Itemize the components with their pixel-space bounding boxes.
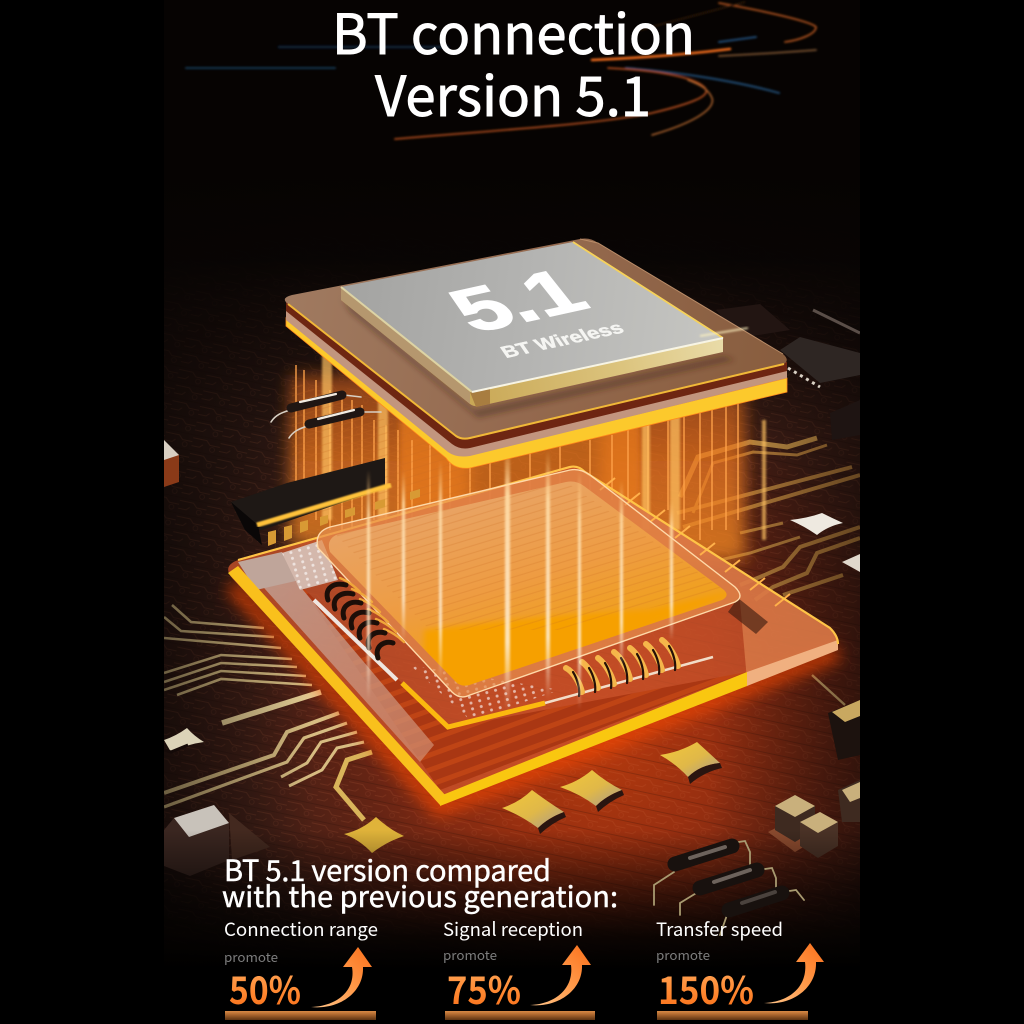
- stat: connection range: Connection range: [224, 916, 378, 942]
- inner yellow L: [402, 683, 545, 727]
- component: pads lower right: [768, 818, 822, 852]
- stat: transfer speed: 150%: [658, 960, 754, 1015]
- component: white pad edge: [842, 554, 860, 572]
- left edge component: [164, 440, 179, 487]
- component: left gold pad: [344, 817, 404, 853]
- right coil: [566, 640, 678, 696]
- stat: signal reception: Signal reception: [443, 916, 583, 942]
- plate upper right glass: [609, 488, 836, 672]
- stat: connection range: [224, 916, 378, 1020]
- yellow lower zone of core: [422, 593, 726, 686]
- right gold traces: [677, 438, 860, 705]
- component: square capacitor: [164, 805, 229, 876]
- title: [332, 0, 695, 132]
- die label 5.1: 5.1: [434, 256, 602, 345]
- component: cream pad left: [164, 728, 204, 752]
- left coil: [327, 578, 404, 658]
- surface-mount components: [164, 513, 860, 876]
- gray corner: [238, 552, 300, 590]
- plate top: [285, 238, 787, 439]
- circuit board background: [164, 221, 860, 948]
- component: lower pad: [502, 790, 564, 828]
- left gold traces: [164, 605, 372, 820]
- comparison heading: with the previous generation:: [222, 874, 618, 916]
- silver inner rim: [314, 600, 397, 680]
- pale right edge: [747, 640, 838, 686]
- bottom fade to black: [164, 830, 860, 1024]
- arrow: transfer speed: [764, 943, 824, 1003]
- stat: signal reception: [443, 916, 595, 1020]
- component: white pad right: [790, 513, 843, 535]
- glowing core: [329, 482, 727, 686]
- yellow bottom band: [440, 672, 747, 806]
- arrow: connection range: [311, 947, 372, 1007]
- component: right gold pad: [660, 742, 720, 777]
- title: Version 5.1: [375, 52, 651, 132]
- stat: transfer speed: [656, 916, 824, 1020]
- vertical light rays over core: [367, 440, 673, 710]
- glow around plate: [232, 585, 838, 808]
- stat: transfer speed: Transfer speed: [656, 916, 783, 942]
- left translucent strip: [264, 581, 434, 762]
- upper chip: [285, 238, 787, 468]
- light beams glow: [290, 355, 766, 560]
- component: centre pad: [560, 770, 622, 806]
- axial resistors bottom right: [654, 841, 804, 935]
- silver die side: [341, 300, 723, 406]
- silver die top: [341, 242, 723, 392]
- chip shadow on plate: [342, 298, 735, 418]
- light flare: [700, 328, 748, 336]
- die label BT Wireless: BT Wireless: [497, 319, 628, 362]
- stat: transfer speed: promote: [656, 945, 710, 964]
- comparison heading: BT 5.1 version compared: [224, 848, 551, 890]
- raised bezel: [317, 470, 740, 697]
- black connector block left: [231, 458, 420, 546]
- lower yellow layer: [286, 318, 787, 468]
- core hatch lines: [336, 482, 724, 630]
- small glass diodes: [271, 394, 381, 438]
- lower chip: glass substrate plate: [228, 467, 838, 808]
- header panel: [164, 0, 860, 166]
- top fade to black: [164, 165, 860, 435]
- glass rungs top right: [600, 478, 790, 606]
- upper right dark components: [716, 304, 860, 440]
- yellow left edge band: [228, 566, 446, 805]
- dotted solder zones: [282, 540, 338, 590]
- dark side shading: [164, 301, 860, 918]
- component: gold side block: [828, 700, 860, 760]
- stat: connection range: promote: [224, 947, 278, 966]
- header light streaks: [186, 2, 816, 139]
- dark red gap: [286, 302, 787, 448]
- stat: signal reception: promote: [443, 945, 497, 964]
- arrow: signal reception: [530, 945, 591, 1005]
- pale layer: [286, 308, 787, 456]
- stat: connection range: 50%: [229, 960, 301, 1015]
- comparison heading: [222, 848, 618, 916]
- plate body: [228, 467, 838, 797]
- stat: signal reception: 75%: [447, 960, 521, 1015]
- plate lower interior: [300, 585, 747, 790]
